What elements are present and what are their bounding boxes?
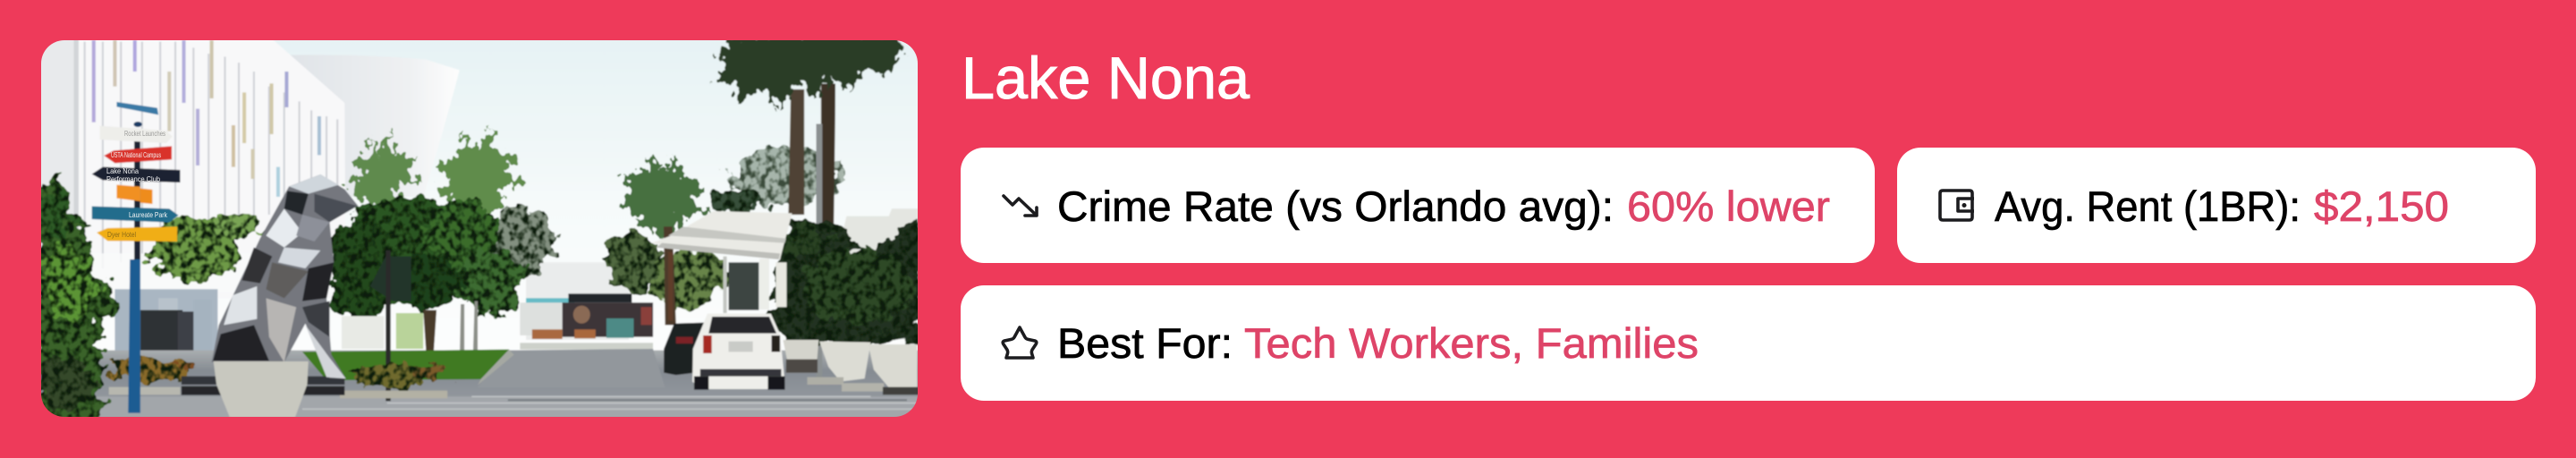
background trees	[151, 146, 841, 307]
road	[41, 349, 918, 400]
average rent text: Avg. Rent (1BR):	[1995, 182, 2301, 230]
signpost lettering: Performance Club	[106, 174, 160, 183]
palm trees	[348, 128, 708, 235]
cars	[664, 314, 784, 390]
right dark plants	[768, 221, 925, 344]
tall palms	[714, 36, 901, 382]
icon: trending down	[1004, 196, 1037, 216]
heading: Lake Nona	[962, 45, 1250, 111]
distant building	[520, 262, 653, 340]
signpost lettering: Rocket Launches	[124, 129, 165, 138]
sculpture: mirrored dog	[212, 174, 358, 378]
photo: Lake Nona street scene	[30, 36, 925, 423]
cylinder building	[284, 55, 460, 197]
average rent text	[1995, 182, 2449, 230]
canopy building rear	[843, 208, 918, 254]
signpost lettering	[106, 129, 168, 239]
icon: wallet	[1940, 191, 1974, 220]
signpost lettering: Laureate Park	[129, 210, 168, 219]
crime rate text: 60% lower	[1627, 182, 1830, 230]
average rent text: $2,150	[2314, 182, 2449, 230]
left building	[37, 38, 351, 360]
central trees	[329, 197, 523, 319]
card: best for	[961, 285, 2536, 401]
canopy	[652, 211, 792, 320]
lawn	[302, 350, 509, 380]
icon: star	[1003, 327, 1037, 358]
left hedge	[30, 176, 112, 423]
signpost lettering: Dyer Hotel	[107, 230, 136, 239]
right planters	[783, 340, 919, 394]
card: average rent	[1897, 148, 2536, 263]
bushes	[109, 358, 447, 387]
best for text: Tech Workers, Families	[1244, 319, 1699, 367]
dog planter	[214, 361, 309, 418]
crime rate text: Crime Rate (vs Orlando avg):	[1057, 182, 1614, 230]
best for text	[1057, 319, 1699, 367]
street sign post	[370, 257, 411, 301]
signpost lettering: USTA National Campus	[111, 150, 161, 159]
signpost	[92, 102, 180, 413]
best for text: Best For:	[1057, 319, 1233, 367]
card: crime rate	[961, 148, 1875, 263]
signpost lettering: Lake Nona	[106, 166, 139, 175]
